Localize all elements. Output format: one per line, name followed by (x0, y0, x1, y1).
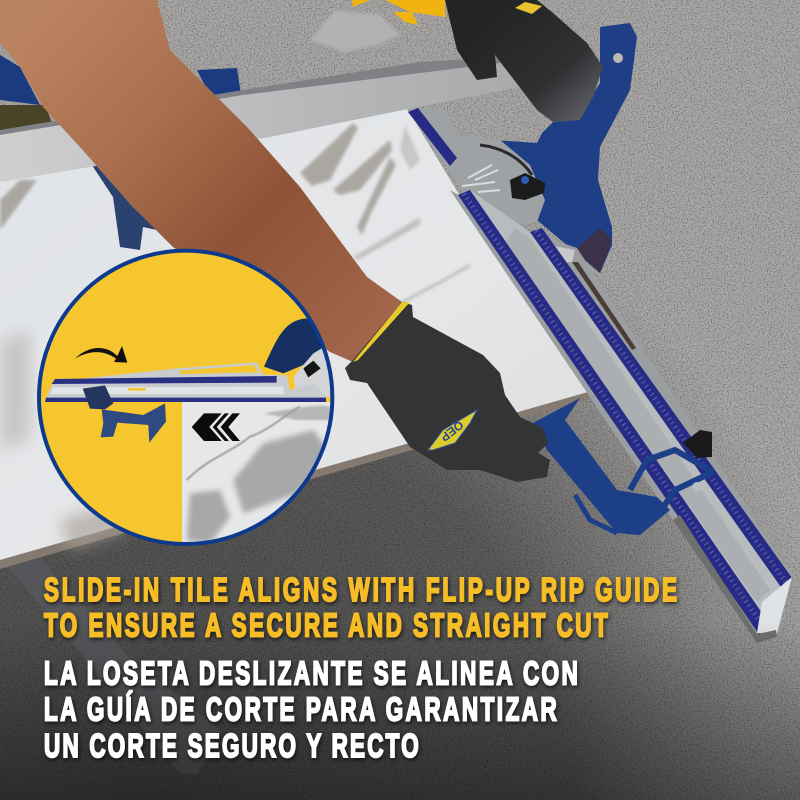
cutter bar (0, 56, 530, 182)
marble quadrant (182, 318, 335, 547)
top-right tool head (264, 318, 322, 374)
clamp straps (630, 450, 713, 512)
bottom edge (673, 515, 777, 643)
english line one: SLIDE-IN TILE ALIGNS WITH FLIP-UP RIP GUIDE (44, 571, 677, 608)
top bolt (613, 53, 623, 63)
base casting (493, 23, 637, 273)
ruler far (530, 228, 792, 590)
tray center (505, 228, 770, 602)
protractor marks (462, 165, 500, 192)
ruler top short (408, 108, 457, 166)
slot frame (554, 246, 575, 262)
yellow cuff (353, 302, 410, 362)
clamp bolt (692, 482, 702, 492)
slot in outer rail (572, 262, 636, 350)
left blue mount (0, 55, 245, 250)
guide knob (683, 430, 712, 458)
ruler far ticks (536, 231, 787, 584)
chevrons (192, 413, 240, 441)
flip-up rip guide (533, 398, 713, 535)
spanish line three: UN CORTE SEGURO Y RECTO (44, 727, 419, 764)
spanish line two: LA GUÍA DE CORTE PARA GARANTIZAR (44, 690, 557, 728)
casting shadow side (575, 228, 612, 273)
ruler near long (458, 190, 762, 636)
spanish text (44, 654, 578, 764)
end plate (757, 577, 792, 633)
machine rail assembly (407, 23, 792, 643)
tile spacers (310, 0, 445, 52)
marble tile (0, 105, 592, 569)
top glove (445, 0, 603, 122)
glove logo text: QEP (438, 418, 466, 444)
guide body (533, 398, 670, 535)
inset tool (45, 361, 327, 443)
knob blue cap (521, 176, 529, 184)
circle border (39, 251, 332, 544)
protractor arc (480, 145, 532, 175)
outer rail body (450, 190, 792, 643)
lower tool bar shadow (8, 558, 220, 775)
inset circle (39, 251, 335, 547)
spanish line one: LA LOSETA DESLIZANTE SE ALINEA CON (44, 654, 578, 692)
ruler near ticks (464, 194, 761, 623)
english heading (44, 571, 677, 644)
protractor plate (407, 107, 545, 260)
arm (0, 0, 402, 362)
tray (470, 190, 783, 613)
adjusting knob (510, 173, 545, 200)
circle yellow fill (40, 252, 331, 543)
curved arrow (75, 346, 127, 363)
glove logo (428, 410, 477, 450)
dark bottom gradient (0, 620, 800, 800)
english line two: TO ENSURE A SECURE AND STRAIGHT CUT (44, 606, 608, 644)
bottom glove (345, 302, 550, 482)
glove brand patch top (515, 2, 542, 14)
guide handle (575, 495, 617, 533)
